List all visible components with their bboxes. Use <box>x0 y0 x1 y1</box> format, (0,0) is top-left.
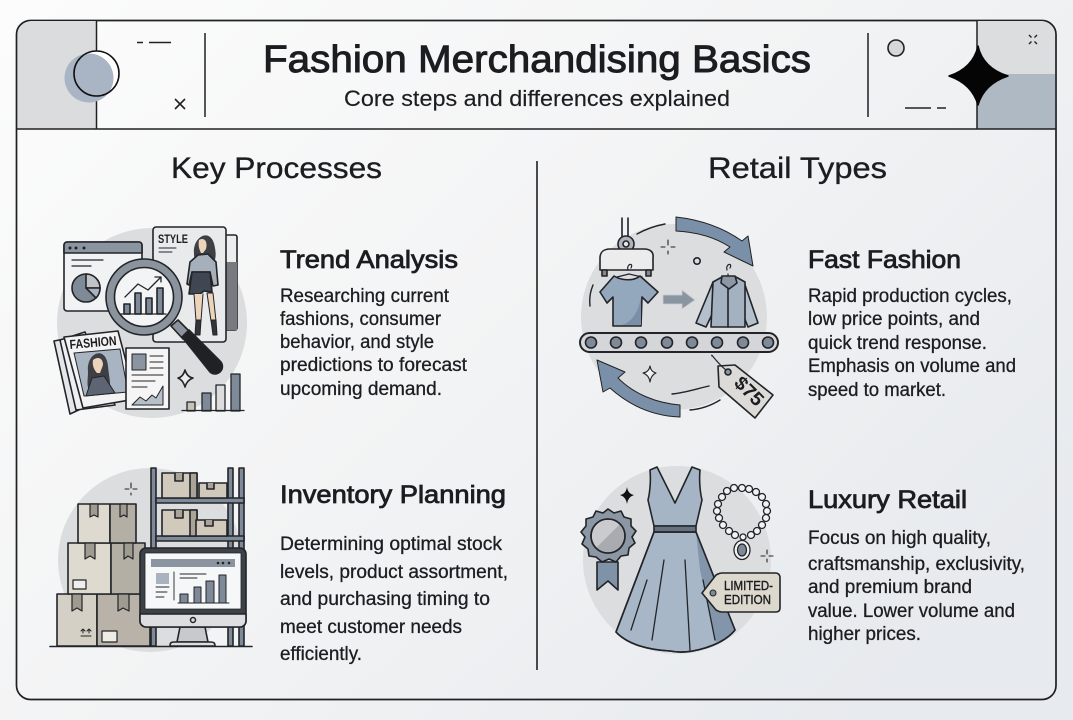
fashion magazine: FASHION <box>69 333 117 352</box>
icon: small sparkle <box>1029 35 1037 44</box>
arrow right <box>663 290 695 309</box>
icon: trend analysis illustration <box>54 227 247 418</box>
small bar chart <box>182 374 244 411</box>
body: Inventory Planning: meet customer needs <box>280 617 462 638</box>
icon: right circle and dashes <box>888 40 946 108</box>
body: Inventory Planning: efficiently. <box>280 644 362 665</box>
style card with model <box>153 227 237 342</box>
heading: Key Processes: Key Processes <box>171 152 382 185</box>
icon: left dashes and cross <box>137 42 185 109</box>
limited edition tag: LIMITED- <box>724 578 773 593</box>
body: Fast Fashion: low price points, and <box>808 309 980 330</box>
pearl necklace <box>714 484 770 560</box>
rosette badge with ribbon <box>581 509 636 590</box>
text: Trend Analysis <box>280 246 468 400</box>
icon: left circle ornament <box>64 51 119 102</box>
computer monitor dashboard <box>140 548 246 646</box>
jacket on hanger <box>696 264 758 327</box>
magnifying glass with bar chart <box>106 259 222 374</box>
subtitle: Core steps and differences explained <box>344 86 730 111</box>
icon: fast fashion illustration <box>580 217 778 418</box>
heading: Inventory Planning: Inventory Planning <box>280 481 506 509</box>
warehouse shelving <box>151 468 244 646</box>
icon: inventory planning illustration <box>50 468 252 652</box>
stacked cardboard boxes <box>57 504 150 646</box>
cycle arrows <box>590 217 753 417</box>
body: Fast Fashion: Emphasis on volume and <box>808 356 1016 377</box>
t-shirt on hanger <box>600 264 658 326</box>
body: Inventory Planning: levels, product assortment, <box>280 562 508 583</box>
heading: Trend Analysis: Trend Analysis <box>280 246 458 274</box>
body: Trend Analysis: fashions, consumer <box>280 309 442 330</box>
sparkle <box>178 370 193 387</box>
limited edition tag: EDITION <box>724 592 771 607</box>
body: Luxury Retail: Focus on high quality, <box>808 528 991 549</box>
limited edition tag <box>702 573 780 612</box>
icon: luxury retail illustration <box>581 466 780 654</box>
title: Fashion Merchandising Basics <box>263 39 811 81</box>
body: Inventory Planning: and purchasing timing to <box>280 589 490 610</box>
sparkles <box>620 487 634 504</box>
browser window <box>64 242 142 311</box>
heading: Retail Types: Retail Types <box>708 152 887 185</box>
body: Fast Fashion <box>808 286 1016 401</box>
text: Fast Fashion <box>808 246 1016 401</box>
body: Trend Analysis <box>280 286 468 400</box>
body: Fast Fashion: quick trend response. <box>808 333 987 354</box>
icon: four-point star <box>949 46 1008 105</box>
price tag: $75 <box>729 373 768 411</box>
machine gripper <box>600 218 653 276</box>
body: Fast Fashion: Rapid production cycles, <box>808 286 1012 307</box>
heading: Luxury Retail: Luxury Retail <box>808 486 967 514</box>
body: Trend Analysis: behavior, and style <box>280 332 434 353</box>
body: Luxury Retail: craftsmanship, exclusivity, <box>808 554 1025 575</box>
conveyor belt <box>580 333 778 352</box>
body: Inventory Planning <box>280 534 508 665</box>
body: Luxury Retail <box>808 528 1025 645</box>
report page <box>126 348 169 409</box>
body: Fast Fashion: speed to market. <box>808 380 946 401</box>
body: Luxury Retail: higher prices. <box>808 624 921 645</box>
header band <box>17 21 1056 129</box>
center divider <box>536 161 538 670</box>
style card with model: STYLE <box>158 232 188 246</box>
text: Luxury Retail <box>808 486 1025 645</box>
fashion magazine <box>54 331 136 414</box>
body: Trend Analysis: Researching current <box>280 286 450 307</box>
heading: Fast Fashion: Fast Fashion <box>808 246 961 274</box>
dress <box>616 467 735 652</box>
body: Luxury Retail: and premium brand <box>808 577 972 598</box>
text: Inventory Planning <box>280 481 508 665</box>
price tag <box>712 355 773 418</box>
body: Inventory Planning: Determining optimal stock <box>280 534 502 555</box>
small marks <box>661 240 675 254</box>
body: Trend Analysis: upcoming demand. <box>280 379 442 400</box>
sparkle <box>125 483 137 495</box>
body: Luxury Retail: value. Lower volume and <box>808 601 1015 622</box>
body: Trend Analysis: predictions to forecast <box>280 355 468 376</box>
